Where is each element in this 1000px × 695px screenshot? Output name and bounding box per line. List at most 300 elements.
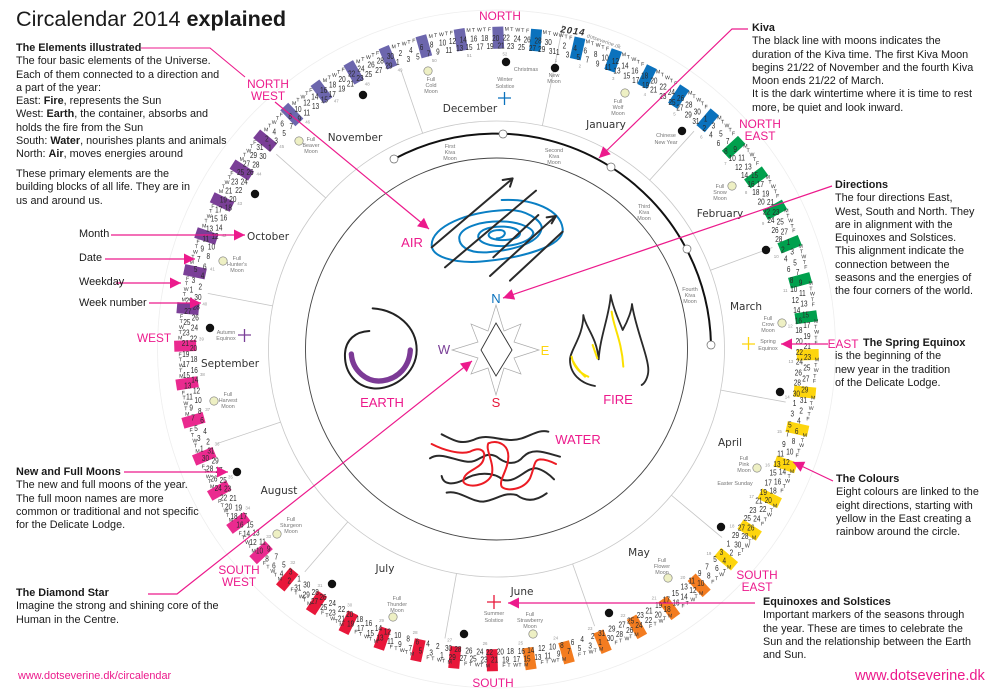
week 29: 16: [365, 618, 372, 628]
week 19: 10: [697, 578, 704, 588]
week 23: 8: [560, 640, 564, 650]
week 53: 29: [538, 44, 545, 54]
text: the elements illustrated: South: Water, nourishes plants and animals: [16, 135, 227, 147]
week 6: 6: [700, 135, 703, 140]
week 22: MTWTF: [612, 631, 641, 648]
week 35: 30: [202, 454, 209, 463]
week 48: 26: [368, 60, 375, 70]
week 20: 12: [689, 585, 697, 595]
Kiva arc with moons: Kiva: [445, 150, 455, 156]
week 10: 5: [793, 258, 797, 267]
direction labels: [137, 9, 858, 690]
week 17: 27: [738, 523, 745, 533]
week 3: 14: [621, 61, 629, 71]
week 27: 6: [415, 637, 419, 647]
text: kiva: It is the dark wintertime where it is time to rest: [752, 88, 972, 100]
text: the colours: Eight colours are linked to the: [836, 486, 979, 498]
week 1: 1: [555, 58, 558, 63]
week 8: 17: [757, 179, 764, 189]
week 31: 28: [312, 587, 319, 597]
week 24: 15: [523, 654, 531, 664]
week 32: 6: [272, 561, 276, 571]
week 46: 46: [305, 120, 311, 125]
week 27: 30: [445, 643, 452, 653]
week 43: 22: [235, 185, 242, 195]
text: the elements illustrated: [16, 42, 227, 160]
week 23: MTWTF: [577, 645, 605, 660]
week 27: MTWTF: [425, 654, 453, 667]
week 29: [336, 601, 390, 649]
week 28: 13: [376, 633, 384, 643]
text: the elements illustrated: East: Fire, represents the Sun: [16, 95, 161, 107]
solstice and equinox markers: Summer: [484, 611, 504, 617]
direction labels: SOUTH: [218, 563, 260, 577]
week 12: 19: [803, 331, 811, 341]
week 8: MTWTF: [763, 173, 783, 201]
week 48: 28: [377, 56, 384, 66]
solstice and equinox markers: Equinox: [216, 336, 236, 342]
week 23: 3: [588, 641, 592, 651]
moon and festival captions: Moon: [230, 268, 244, 274]
new moons: [206, 58, 784, 638]
week 28: 12: [384, 627, 391, 637]
week 18: 29: [732, 530, 739, 540]
text: equinoxes and solstices: Equinoxes and Solstices: [763, 596, 891, 608]
week 14: 3: [790, 409, 794, 419]
week 3: 15: [623, 71, 630, 81]
week 36: 7: [191, 413, 195, 423]
week 40: 4: [201, 271, 204, 281]
week 36: 5: [194, 423, 198, 433]
week 22: [589, 609, 641, 654]
year label 2014: 2014: [559, 24, 586, 39]
arrow: spring equinox: [781, 343, 828, 345]
week 31: MTWTF: [288, 585, 315, 609]
week 41: MTWTF: [188, 238, 203, 267]
week 12: 20: [796, 336, 803, 346]
week 20: 14: [681, 592, 688, 602]
week 19: [679, 545, 735, 600]
week 16: 16: [765, 462, 770, 467]
week 50: 9: [436, 47, 440, 57]
week 26: 24: [476, 647, 483, 656]
week 33: 13: [252, 528, 259, 538]
week 40: 40: [202, 301, 208, 306]
week 20: 18: [664, 604, 671, 614]
week 48: 25: [365, 69, 372, 79]
moon and festival captions: Strawberry: [517, 618, 543, 624]
text: the diamond star: [16, 587, 219, 626]
direction labels: WEST: [137, 331, 171, 345]
footer link right: www.dotseverine.dk: [855, 668, 985, 684]
week 15: 12: [783, 457, 790, 467]
week 40: 2: [198, 282, 202, 292]
week 50: 50: [432, 58, 437, 63]
week 9: 27: [781, 227, 788, 237]
week 50: 11: [445, 45, 452, 55]
week 44: 29: [250, 150, 257, 160]
week 31: [275, 559, 328, 611]
week 13: [785, 354, 820, 401]
week 47: 17: [329, 89, 336, 99]
week 53: 30: [545, 37, 552, 47]
arrow: directions: [503, 186, 832, 298]
week 18: 3: [720, 547, 723, 557]
week 36: 3: [197, 433, 201, 443]
week 6: 3: [712, 121, 715, 131]
week 5: 31: [692, 116, 699, 126]
week 52: 27: [529, 43, 536, 53]
week 48: 29: [385, 61, 392, 71]
week 4: 21: [650, 85, 657, 95]
icon: water: [430, 431, 560, 502]
week 21: 21: [652, 596, 657, 601]
solstice and equinox markers: Spring: [760, 339, 776, 345]
week 49: 3: [407, 54, 410, 64]
text: new and full moons: New and Full Moons: [16, 466, 121, 478]
week 52: 26: [524, 35, 531, 45]
week 35: 35: [228, 474, 233, 479]
week 11: [782, 280, 820, 328]
week 34: 19: [235, 503, 242, 513]
week 15: 10: [786, 447, 793, 457]
week 13: MTWTF: [812, 357, 820, 385]
arrow: month: [111, 234, 245, 236]
week 17: MTWTF: [758, 501, 780, 530]
week 42: 14: [215, 223, 222, 233]
week 5: MTWTF: [685, 88, 711, 112]
moon and festival captions: Thunder: [387, 602, 407, 608]
week 39: 22: [190, 334, 197, 344]
week 32: [247, 533, 301, 586]
week 41: [185, 225, 228, 275]
week 34: 23: [224, 484, 231, 494]
text: the colours: rainbow around the circle.: [836, 526, 960, 538]
week 10: 10: [774, 254, 779, 259]
solstice and equinox markers: Equinox: [758, 346, 778, 352]
week 7: 7: [724, 161, 727, 166]
week 33: 11: [259, 537, 266, 547]
week 40: 30: [194, 292, 202, 302]
moon and festival captions: Full: [224, 392, 232, 398]
week 9: [759, 206, 805, 259]
week 38: 38: [200, 372, 205, 377]
moon and festival captions: Full: [287, 517, 295, 523]
week 44: 27: [243, 159, 250, 169]
week 43: 25: [237, 167, 244, 177]
ring outlines: [158, 10, 836, 688]
week 30: 25: [320, 602, 327, 612]
week 38: 15: [183, 370, 190, 380]
moon and festival captions: Full: [526, 612, 534, 618]
week 42: 16: [220, 213, 227, 223]
week 21: 19: [655, 600, 662, 610]
week 35: 29: [212, 456, 219, 466]
week 23: 4: [580, 634, 584, 644]
week 39: 23: [182, 328, 190, 338]
week 16: 17: [765, 478, 772, 488]
moon and festival captions: New Year: [654, 140, 678, 146]
week 22: 28: [616, 629, 623, 639]
week 22: 27: [618, 620, 626, 630]
week 13: 29: [801, 385, 808, 395]
week 6: 6: [717, 138, 720, 148]
week 32: 7: [275, 552, 278, 562]
week 20: 15: [672, 588, 679, 598]
text: the diamond star: Human in the Centre.: [16, 614, 119, 626]
direction labels: EAST: [745, 129, 775, 143]
week 34: 20: [225, 502, 232, 512]
week 8: 23: [772, 207, 779, 217]
text: directions: This alignment indicate the: [835, 245, 964, 257]
text: new and full moons: [16, 466, 199, 531]
moon and festival captions: Full: [764, 316, 772, 322]
week 52: 28: [535, 36, 542, 46]
week 38: MTWTF: [178, 352, 184, 380]
week 15: 9: [782, 439, 786, 449]
week 32: 5: [282, 560, 286, 570]
week 1: [552, 32, 586, 68]
week 29: MTWTF: [352, 627, 381, 647]
week 49: 6: [420, 42, 423, 52]
diamond star compass: [438, 291, 550, 410]
text: equinoxes and solstices: Important markers of the seasons through: [763, 609, 964, 621]
week 30: 22: [338, 604, 345, 614]
text: directions: are in alignment with the: [835, 219, 953, 231]
week 8: 18: [752, 187, 759, 197]
week 10: 7: [796, 267, 799, 277]
text: new and full moons: common or traditional and not specific: [16, 506, 199, 518]
week 24: MTWTF: [540, 656, 567, 667]
week 41: 11: [203, 234, 209, 243]
week 14: 4: [797, 416, 801, 425]
month names: September: [201, 358, 260, 370]
week 6: 4: [709, 130, 713, 140]
week 45: 8: [288, 111, 292, 121]
week 31: 31: [318, 583, 323, 588]
week 35: 27: [215, 465, 223, 475]
direction labels: EAST: [742, 580, 772, 594]
week 30: 24: [329, 598, 336, 608]
week 32: MTWTF: [260, 558, 285, 585]
week 17: 22: [759, 504, 766, 514]
Kiva arc with moons: Fourth: [682, 287, 698, 293]
week 37: [175, 373, 212, 419]
week 5: 29: [685, 110, 692, 120]
week 17: 17: [749, 494, 755, 499]
week 40: 29: [186, 296, 193, 306]
week 17: 26: [747, 523, 754, 533]
week 18: MTWTF: [735, 533, 759, 560]
week 7: [720, 141, 772, 196]
week 48: 27: [375, 65, 382, 75]
text: the elements illustrated: Each of them connected to a direction and: [16, 68, 219, 80]
moon and festival captions: Moon: [304, 149, 318, 155]
week 5: 5: [673, 112, 676, 117]
week 19: 6: [715, 563, 719, 573]
week 19: 11: [688, 576, 695, 586]
moon and festival captions: Full: [233, 256, 241, 262]
footer link left: www.dotseverine.dk/circalendar: [18, 670, 171, 682]
week 26: 23: [481, 655, 488, 665]
moon and festival captions: Moon: [284, 529, 298, 535]
week 30: 23: [329, 608, 336, 618]
week 28: 9: [398, 639, 402, 649]
direction labels: WEST: [251, 89, 285, 103]
week 20: 13: [681, 582, 688, 592]
week 33: [224, 504, 276, 558]
direction labels: NORTH: [247, 77, 289, 91]
week 41: 12: [211, 231, 219, 241]
week 29: 20: [346, 609, 353, 619]
week 10: MTWTF: [797, 243, 811, 271]
text: primary elements: [16, 168, 190, 206]
arrow: new and full moons: [124, 471, 228, 473]
week 52: 25: [518, 42, 525, 52]
month names: October: [247, 231, 290, 243]
week 3: 13: [613, 66, 620, 76]
week 12: 21: [804, 341, 811, 351]
label: month: Month: [79, 228, 109, 240]
arrow: week number: [149, 302, 201, 304]
week 26: 26: [465, 646, 472, 655]
week 27: 27: [447, 638, 453, 643]
week 36: 36: [215, 441, 220, 446]
week 2: 12: [612, 56, 619, 66]
moon and festival captions: Moon: [547, 79, 561, 85]
text: the elements illustrated: The Elements illustrated: [16, 42, 141, 54]
week 37: 37: [205, 407, 211, 412]
solstice and equinox markers: Solstice: [485, 618, 503, 624]
week 26: 28: [454, 645, 462, 654]
week 13: 25: [803, 363, 810, 373]
week 9: 1: [787, 237, 790, 247]
week 18: 18: [730, 524, 735, 529]
moon and festival captions: Full: [716, 184, 724, 190]
week 39: 27: [184, 306, 191, 316]
week 46: 13: [312, 101, 319, 111]
week 34: 24: [215, 483, 222, 493]
text: equinoxes and solstices: Sun and the relationship between the Earth: [763, 636, 971, 648]
Kiva arc with moons: Moon: [443, 156, 457, 162]
week 7: 10: [729, 153, 736, 163]
moon and festival captions: [219, 67, 775, 630]
week 46: [287, 78, 340, 129]
week 12: 18: [795, 325, 802, 335]
week 18: 2: [730, 548, 733, 558]
week 46: 10: [294, 104, 302, 114]
week 27: 2: [436, 641, 440, 651]
arrow: elements to air: [141, 48, 429, 229]
solstice and equinox markers: Winter: [497, 77, 513, 83]
text: directions: connection between the: [835, 258, 950, 270]
text: the diamond star: The Diamond Star: [16, 587, 109, 599]
week 2: 8: [594, 49, 597, 59]
week 42: 17: [215, 205, 222, 215]
moon and festival captions: Full: [427, 77, 435, 83]
week 49: 4: [409, 45, 413, 55]
week 12: 23: [804, 352, 811, 362]
week 38: 20: [190, 343, 197, 353]
site label on ring: dotseverine.dk: [586, 33, 622, 51]
week 51: 16: [470, 34, 477, 44]
week 45: 6: [280, 119, 284, 129]
week 10: 3: [790, 247, 794, 257]
week 30: 27: [311, 596, 318, 606]
moon and festival captions: Hunter's: [227, 262, 247, 268]
week 51: 18: [481, 33, 488, 43]
month names: June: [510, 586, 533, 598]
week 2: 2: [579, 64, 582, 69]
week 15: 7: [786, 429, 789, 439]
week 2: MTWTF: [584, 38, 611, 53]
week 15: 8: [792, 436, 795, 446]
text: the spring equinox: is the beginning of the: [835, 350, 941, 362]
week 18: 4: [723, 556, 726, 566]
week 21: 21: [645, 606, 653, 616]
week 4: 26: [677, 93, 684, 103]
week 37: 13: [184, 381, 191, 391]
week 19: MTWTF: [708, 563, 735, 588]
week 11: 10: [790, 284, 797, 294]
arrow: equinoxes and solstices: [508, 602, 755, 604]
diamond star compass: W: [438, 342, 451, 357]
arrow: date: [105, 258, 195, 260]
week 45: 7: [290, 121, 293, 131]
week 52: 52: [502, 52, 508, 57]
week 29: 14: [375, 623, 382, 633]
week 13: 26: [795, 368, 802, 378]
week 35: MTWTF: [200, 462, 217, 492]
text: the diamond star: Imagine the strong and shining core of the: [16, 600, 219, 612]
week 44: 2: [265, 134, 269, 144]
arrow: weekday: [116, 282, 181, 284]
week 37: 14: [191, 375, 198, 385]
week 47: 21: [347, 79, 354, 89]
moon and festival captions: Harvest: [219, 398, 238, 404]
week 20: MTWTF: [679, 589, 706, 612]
week 46: 11: [303, 108, 310, 118]
week 28: 10: [394, 630, 401, 640]
month names: [201, 103, 762, 598]
week 22: 1: [598, 637, 602, 647]
week 43: [213, 157, 263, 211]
week 39: [174, 300, 208, 345]
week 4: 22: [660, 82, 667, 92]
week 22: 22: [620, 613, 626, 618]
text: primary elements: us and around us.: [16, 194, 103, 206]
week 9: MTWTF: [782, 207, 799, 235]
week 46: 15: [321, 95, 328, 105]
moon and festival captions: New: [549, 73, 559, 79]
week 24: 12: [538, 643, 545, 653]
week 30: 30: [347, 602, 353, 607]
week 8: [741, 172, 791, 227]
week 44: MTWTF: [237, 139, 260, 165]
week 52: MTWTF: [504, 26, 530, 35]
week 12: [788, 319, 820, 363]
label: week number: Week number: [79, 297, 147, 309]
week 48: 30: [387, 51, 394, 61]
week 21: 20: [655, 610, 662, 620]
week 13: 24: [796, 357, 803, 367]
week 36: [181, 407, 222, 457]
week 36: 6: [200, 416, 204, 425]
week 25: MTWTF: [502, 662, 529, 669]
week 48: MTWTF: [354, 50, 382, 67]
moon and festival captions: Moon: [611, 111, 625, 117]
week 4: MTWTF: [653, 67, 681, 89]
